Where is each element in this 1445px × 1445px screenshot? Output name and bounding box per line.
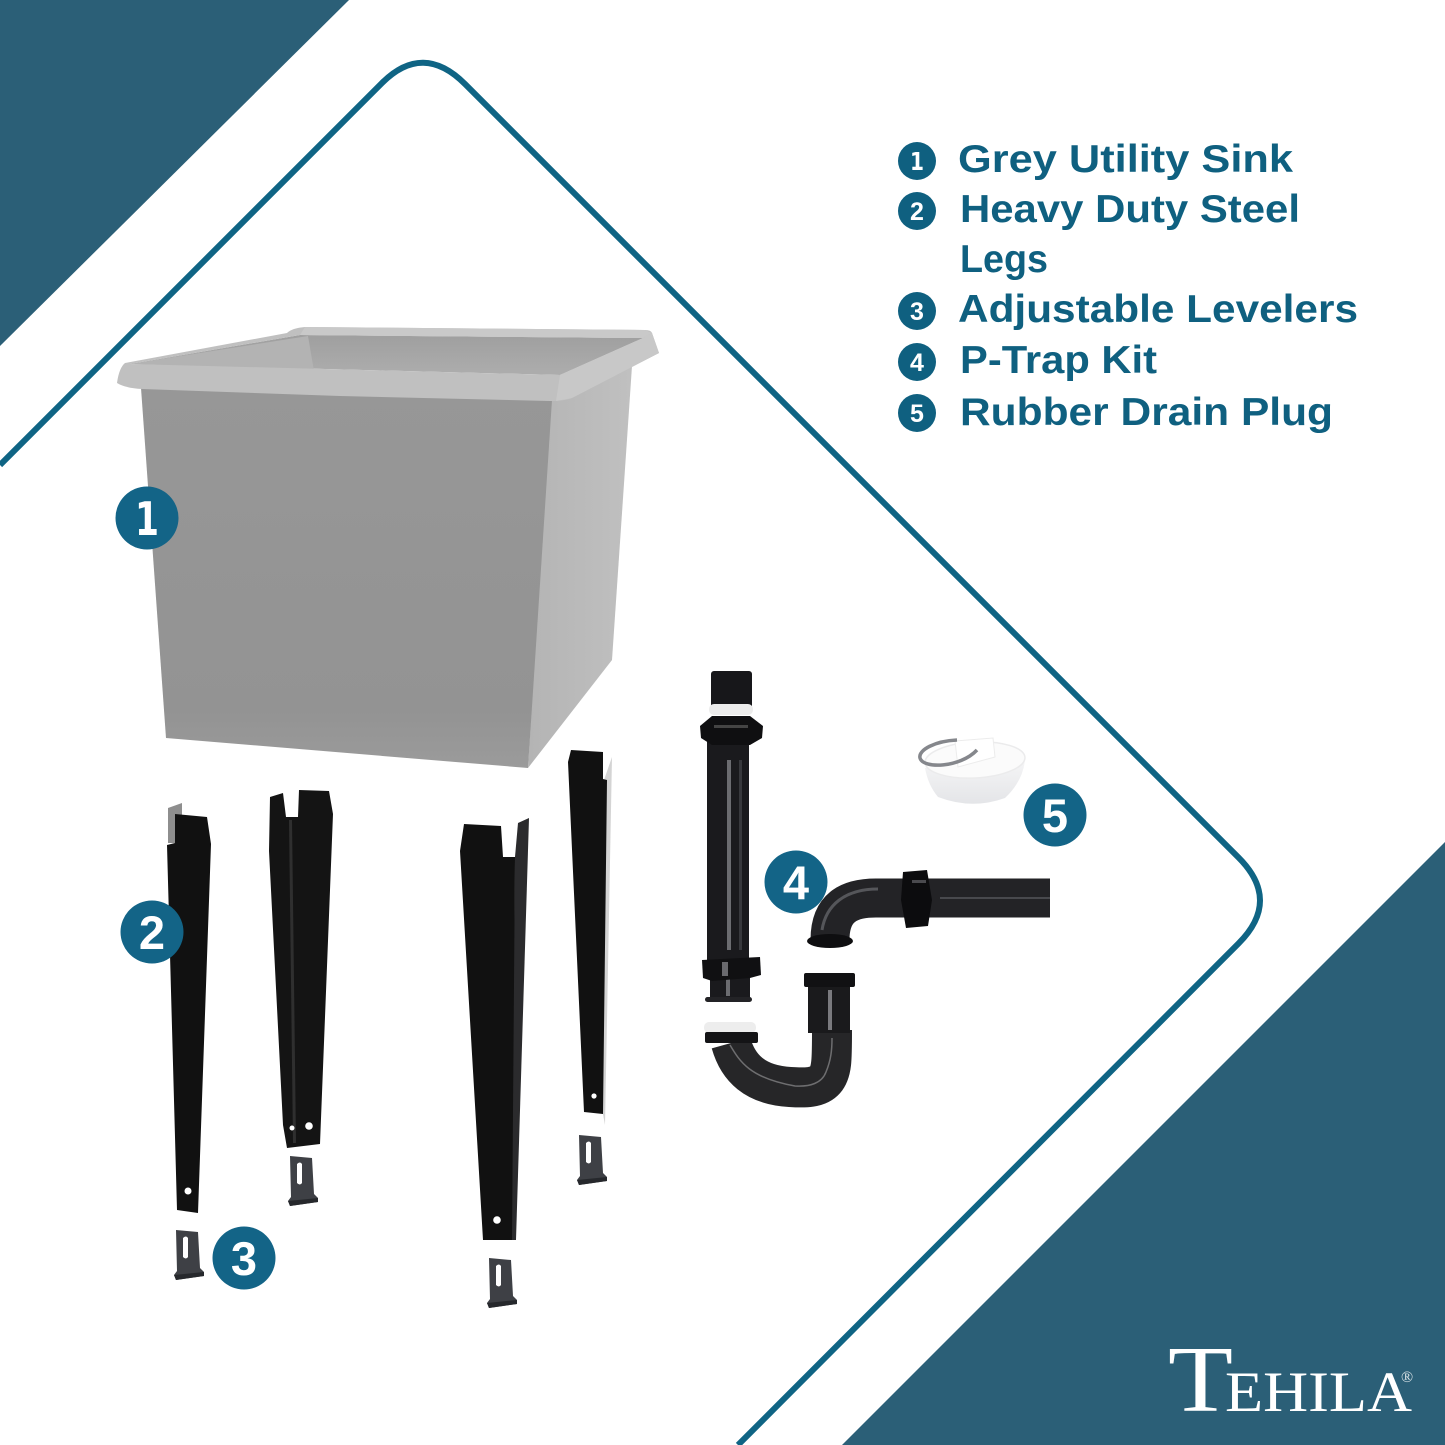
leg one bbox=[167, 803, 211, 1213]
badge 5 bbox=[1024, 784, 1086, 846]
badge 2 bbox=[120, 900, 184, 964]
product: rubber drain plug bbox=[920, 738, 1026, 804]
list item 3: 3 bbox=[910, 298, 924, 326]
list item 1: 1 bbox=[910, 147, 924, 176]
horizontal elbow bbox=[807, 870, 1050, 948]
product: adjustable levelers bbox=[174, 1135, 607, 1308]
sink front face bbox=[141, 388, 552, 768]
product: grey utility sink bbox=[117, 327, 659, 768]
badge 1: 1 bbox=[135, 492, 159, 546]
parts list bbox=[898, 138, 1358, 434]
product: p-trap kit bbox=[700, 671, 1050, 1087]
list item 5: 5 bbox=[910, 400, 924, 428]
logo: Tehila: EHILA bbox=[1225, 1361, 1412, 1424]
badge 4: 4 bbox=[783, 856, 809, 909]
list item 2: Heavy Duty Steel bbox=[960, 188, 1300, 231]
list item 2: 2 bbox=[910, 198, 924, 226]
sink right side bbox=[528, 366, 632, 768]
list item 5: Rubber Drain Plug bbox=[960, 391, 1333, 434]
sink rim bbox=[117, 327, 659, 401]
leveler two bbox=[288, 1156, 318, 1206]
badge 5: 5 bbox=[1042, 789, 1068, 842]
logo: Tehila bbox=[1168, 1328, 1413, 1432]
pull ring bbox=[920, 740, 977, 765]
plug body bbox=[925, 758, 1025, 804]
list item 4: 4 bbox=[910, 349, 924, 377]
product: steel legs bbox=[167, 750, 612, 1240]
logo: Tehila: T bbox=[1168, 1328, 1233, 1432]
list item 4: P-Trap Kit bbox=[960, 339, 1157, 382]
sink rim right band bbox=[556, 333, 659, 401]
badge 3 bbox=[212, 1226, 276, 1290]
list item 3: Adjustable Levelers bbox=[958, 288, 1358, 331]
leveler one bbox=[174, 1230, 204, 1280]
list item 1: Grey Utility Sink bbox=[958, 138, 1293, 181]
list item 2 bbox=[898, 188, 1300, 281]
sink inner left wall bbox=[130, 336, 314, 371]
plug knob bbox=[955, 738, 995, 767]
list item 2: Legs bbox=[960, 238, 1048, 281]
badge 4 bbox=[764, 850, 828, 914]
leg four bbox=[568, 750, 612, 1125]
leg two bbox=[269, 790, 333, 1148]
u-bend trap bbox=[704, 973, 855, 1087]
sink interior bbox=[130, 335, 643, 375]
leveler three bbox=[487, 1258, 517, 1308]
logo: Tehila: ® bbox=[1401, 1369, 1413, 1386]
badge 2: 2 bbox=[139, 906, 165, 959]
background corner: top left bbox=[0, 0, 349, 346]
background corner: bottom right bbox=[842, 842, 1445, 1445]
sink rim back edge bbox=[300, 327, 652, 338]
badge 1 bbox=[116, 486, 178, 550]
vertical tailpiece bbox=[700, 671, 763, 1002]
badge 3: 3 bbox=[231, 1232, 257, 1285]
leg three bbox=[460, 818, 529, 1240]
leveler four bbox=[577, 1135, 607, 1185]
